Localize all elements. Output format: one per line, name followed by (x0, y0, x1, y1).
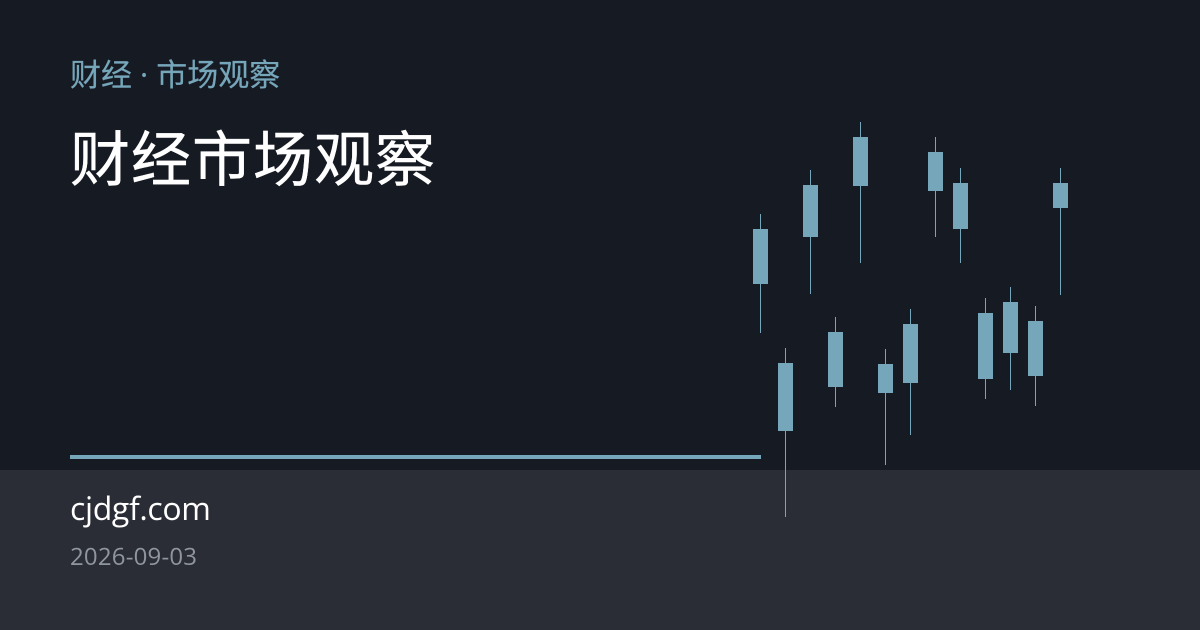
site name: cjdgf.com (70, 487, 211, 530)
footer band (0, 470, 1200, 630)
date: 2026-09-03 (70, 540, 197, 573)
title: 财经市场观察 (70, 117, 436, 199)
eyebrow label: 财经 · 市场观察 (70, 54, 280, 96)
accent line (70, 455, 761, 459)
